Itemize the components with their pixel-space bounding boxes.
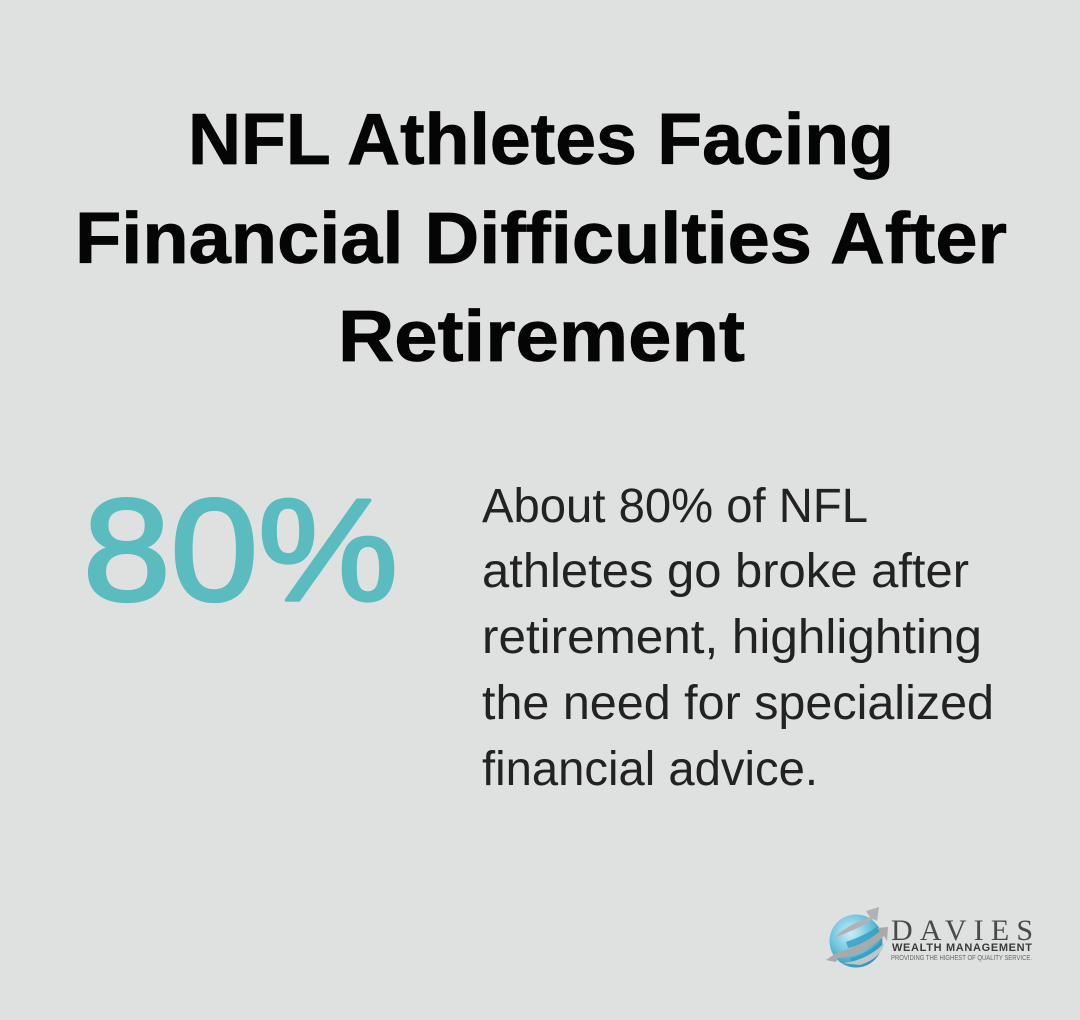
description text: About 80% of NFL (482, 480, 868, 533)
icon: globe with arrows (826, 907, 888, 968)
description text (482, 480, 994, 796)
title: Financial Difficulties After (75, 199, 1007, 279)
statistic: 80%: 80% (83, 469, 398, 631)
logo subtitle: WEALTH MANAGEMENT (892, 942, 1032, 954)
description text: financial advice. (482, 743, 818, 796)
description text: retirement, highlighting (482, 611, 982, 664)
logo: Davies Wealth Management (826, 907, 1033, 968)
logo tagline: PROVIDING THE HIGHEST OF QUALITY SERVICE. (891, 955, 1032, 962)
title (75, 100, 1007, 377)
logo wordmark: DAVIES (891, 914, 1033, 947)
title: Retirement (338, 297, 745, 377)
description text: athletes go broke after (482, 545, 969, 598)
description text: the need for specialized (482, 677, 994, 730)
title: NFL Athletes Facing (188, 100, 894, 180)
